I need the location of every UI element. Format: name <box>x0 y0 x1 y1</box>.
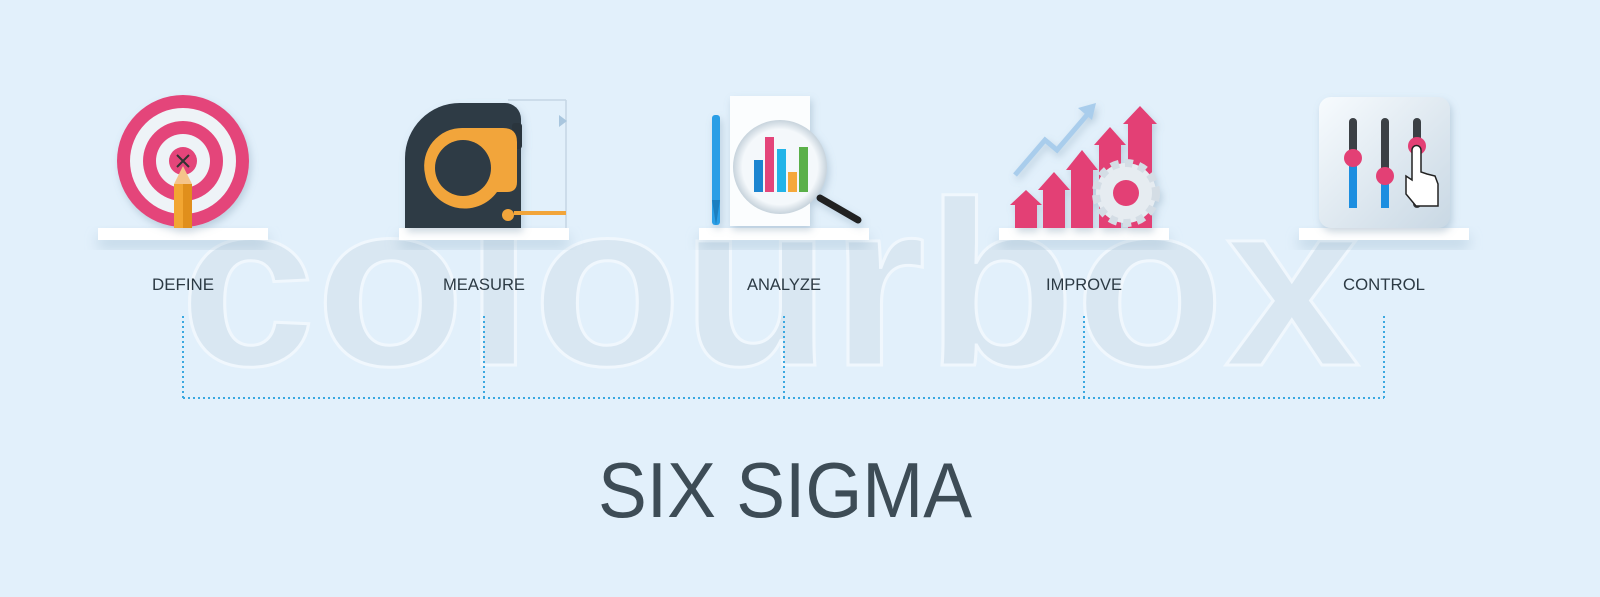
icon: control <box>1319 97 1450 228</box>
icon: improve <box>1010 103 1157 228</box>
icon: analyze <box>712 96 858 226</box>
labels <box>152 275 1425 294</box>
labels: MEASURE <box>443 275 525 294</box>
watermark: colourbox <box>180 152 1360 415</box>
title: SIX SIGMA <box>598 446 972 534</box>
labels: CONTROL <box>1343 275 1425 294</box>
shelves <box>98 228 1469 240</box>
labels: DEFINE <box>152 275 214 294</box>
icon: tape measure <box>405 100 567 228</box>
labels: IMPROVE <box>1046 275 1122 294</box>
labels: ANALYZE <box>747 275 821 294</box>
connector lines <box>183 316 1384 398</box>
icon: target <box>117 95 249 228</box>
